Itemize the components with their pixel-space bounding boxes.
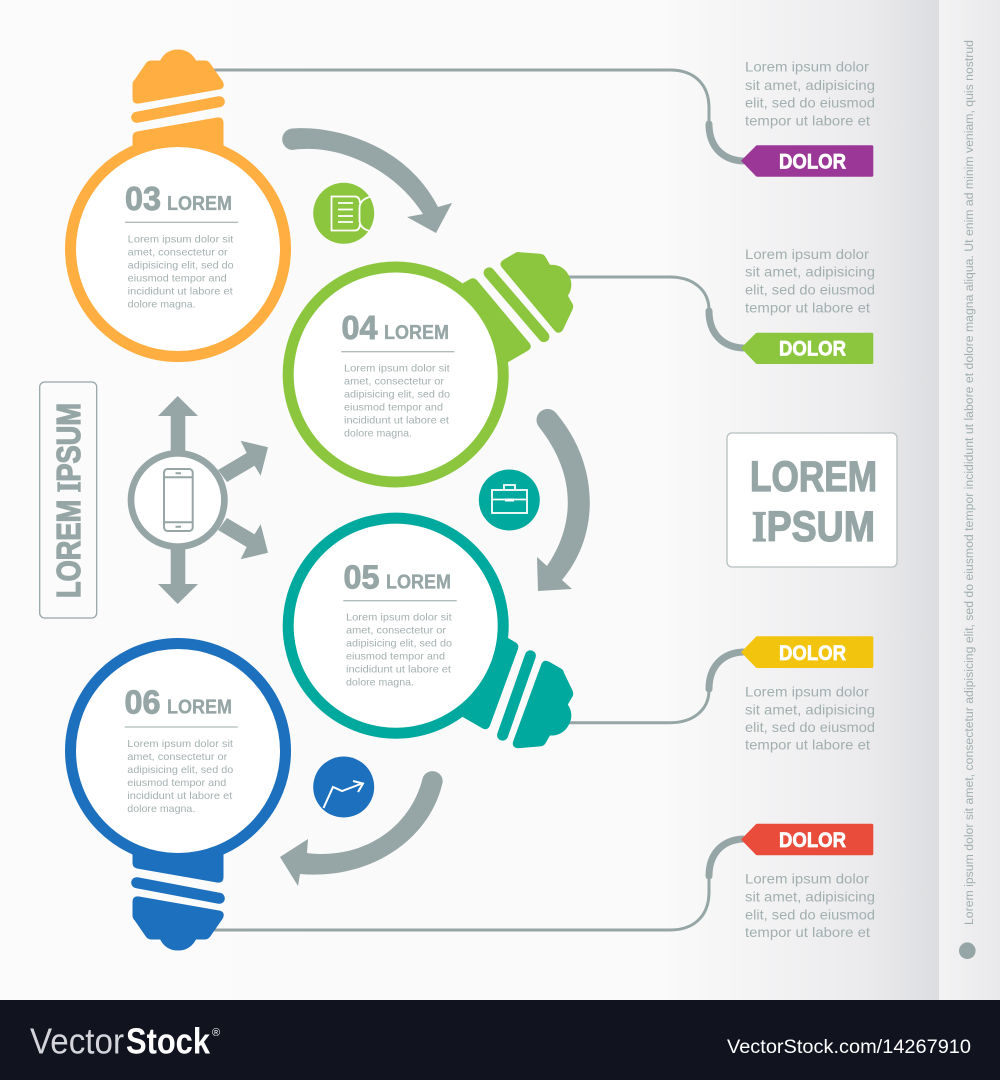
- bulb 05 body text: adipisicing elit, sed do: [346, 638, 452, 650]
- icon: document badge: [313, 183, 374, 244]
- tag: purple dolor: [741, 145, 873, 177]
- bulb 03 shape: [70, 50, 286, 356]
- bulb 04 body text: eiusmod tempor and: [344, 402, 443, 414]
- bulb 05 heading: LOREM: [386, 571, 451, 593]
- hub circle: [131, 453, 224, 547]
- bulb 06 body text: incididunt ut labore et: [127, 790, 232, 802]
- side text block 4: sit amet, adipisicing: [745, 889, 875, 905]
- footer logo: Stock: [126, 1020, 211, 1061]
- bulb 05 teal: [249, 479, 622, 818]
- title box: lorem ipsum: LOREM: [750, 453, 877, 501]
- bulb 05 body text: eiusmod tempor and: [346, 651, 445, 663]
- bulb 06 body text: dolore magna.: [127, 803, 195, 815]
- bulb 03 body text: Lorem ipsum dolor sit: [128, 233, 233, 245]
- connector line: green: [565, 277, 743, 348]
- bulb 05 body text: dolore magna.: [346, 677, 414, 689]
- bulb 05 body text: amet, consectetur or: [346, 625, 447, 637]
- arrow: 05 to 06: [280, 771, 443, 886]
- tag: green dolor: [741, 333, 873, 364]
- footer band: [0, 1000, 1000, 1080]
- side text block 2: sit amet, adipisicing: [745, 264, 875, 280]
- vertical strip text: Lorem ipsum dolor sit amet, consectetur adipisicing elit, sed do eiusmod tempor incididunt ut labore et dolore magna aliqua. Ut enim ad minim veniam, quis nostrud: [964, 40, 976, 925]
- bulb 04 body text: [344, 363, 450, 440]
- hub arrows: [158, 396, 268, 604]
- bulb 04 body text: amet, consectetur or: [344, 376, 445, 388]
- bulb 03 heading: 03: [125, 180, 161, 217]
- footer logo: ®: [212, 1027, 220, 1039]
- bulb 06 shape: [70, 644, 286, 950]
- side text block 1: [745, 59, 875, 128]
- bulb 04 green: [249, 182, 622, 521]
- tag: green dolor: DOLOR: [779, 338, 846, 361]
- arrow: 04 to 05: [537, 409, 590, 591]
- bulb 06 heading: 06: [124, 683, 160, 720]
- bulb 06 heading: LOREM: [167, 696, 232, 718]
- side text block 4: tempor ut labore et: [745, 924, 870, 940]
- bulb 04 shape: [249, 182, 622, 521]
- bulb 05 heading: [343, 558, 457, 601]
- tag: red dolor: [741, 824, 873, 855]
- side text block 2: [745, 246, 875, 315]
- footer image id: VectorStock.com/14267910: [727, 1037, 971, 1058]
- bulb 05 body text: [346, 612, 452, 689]
- bulb 03 body text: adipisicing elit, sed do: [128, 259, 234, 271]
- side text block 3: tempor ut labore et: [745, 737, 870, 753]
- icon: smartphone: [164, 469, 193, 531]
- connector line: top purple: [215, 70, 743, 161]
- bulb 06 body text: amet, consectetur or: [127, 751, 228, 763]
- bulb 06 heading: [124, 683, 238, 727]
- side text block 3: elit, sed do eiusmod: [745, 719, 875, 735]
- right side strip: [939, 0, 1000, 1000]
- title box: lorem ipsum: [727, 433, 897, 567]
- bulb 04 heading: [341, 309, 454, 352]
- bulb 05 heading: 05: [344, 558, 380, 595]
- side text block 1: elit, sed do eiusmod: [745, 95, 875, 111]
- bulb 04 body text: incididunt ut labore et: [344, 415, 449, 427]
- bulb 03 body text: amet, consectetur or: [128, 246, 228, 258]
- strip dot: [959, 942, 976, 959]
- side text block 1: sit amet, adipisicing: [745, 77, 875, 93]
- bulb 05 body text: incididunt ut labore et: [346, 664, 451, 676]
- bulb 04 heading: LOREM: [384, 322, 449, 344]
- bulb 04 heading: 04: [342, 309, 378, 346]
- side text block 3: [745, 683, 875, 753]
- bulb 06 body text: eiusmod tempor and: [127, 777, 226, 789]
- footer logo: Vector: [30, 1020, 124, 1061]
- bulb 04 body text: dolore magna.: [344, 428, 412, 440]
- side text block 1: Lorem ipsum dolor: [745, 59, 869, 75]
- bulb 03 body text: dolore magna.: [128, 298, 196, 310]
- bulb 06 body text: adipisicing elit, sed do: [127, 764, 233, 776]
- side text block 2: tempor ut labore et: [745, 299, 870, 315]
- bulb 06 body text: [127, 738, 233, 815]
- bulb 05 body text: Lorem ipsum dolor sit: [346, 612, 452, 624]
- side text block 4: Lorem ipsum dolor: [745, 871, 869, 887]
- footer logo: [30, 1020, 220, 1061]
- bulb 04 body text: adipisicing elit, sed do: [344, 389, 450, 401]
- side text block 3: Lorem ipsum dolor: [745, 683, 869, 699]
- tag: yellow dolor: [741, 636, 873, 668]
- bulb 05 shape: [249, 479, 622, 818]
- bulb 06 body text: Lorem ipsum dolor sit: [127, 738, 233, 750]
- connector line: red: [215, 839, 743, 930]
- side text block 2: elit, sed do eiusmod: [745, 282, 875, 298]
- tag: red dolor: DOLOR: [779, 829, 846, 852]
- tag: yellow dolor: DOLOR: [779, 642, 846, 665]
- bulb 06 blue: [70, 644, 286, 950]
- side text block 4: [745, 871, 875, 940]
- vertical label box: [40, 382, 97, 618]
- side text block 1: tempor ut labore et: [745, 112, 870, 128]
- side text block 4: elit, sed do eiusmod: [745, 906, 875, 922]
- side text block 2: Lorem ipsum dolor: [745, 246, 869, 262]
- bulb 03 heading: LOREM: [167, 193, 232, 215]
- vertical label box: LOREM IPSUM: [51, 403, 88, 598]
- tag: purple dolor: DOLOR: [779, 150, 846, 173]
- bulb 03 body text: incididunt ut labore et: [128, 285, 233, 297]
- bulb 03 orange: [70, 50, 286, 356]
- icon: chart badge: [313, 756, 374, 818]
- arrow: 03 to 04: [282, 128, 452, 233]
- bulb 03 heading: [125, 180, 238, 222]
- title box: lorem ipsum: IPSUM: [752, 503, 875, 551]
- side text block 3: sit amet, adipisicing: [745, 701, 875, 717]
- icon: briefcase badge: [479, 470, 540, 530]
- bulb 04 body text: Lorem ipsum dolor sit: [344, 363, 450, 375]
- connector line: yellow: [565, 652, 743, 723]
- bulb 03 body text: [128, 233, 234, 310]
- bulb 03 body text: eiusmod tempor and: [128, 272, 227, 284]
- phone hub with arrows: [131, 396, 268, 604]
